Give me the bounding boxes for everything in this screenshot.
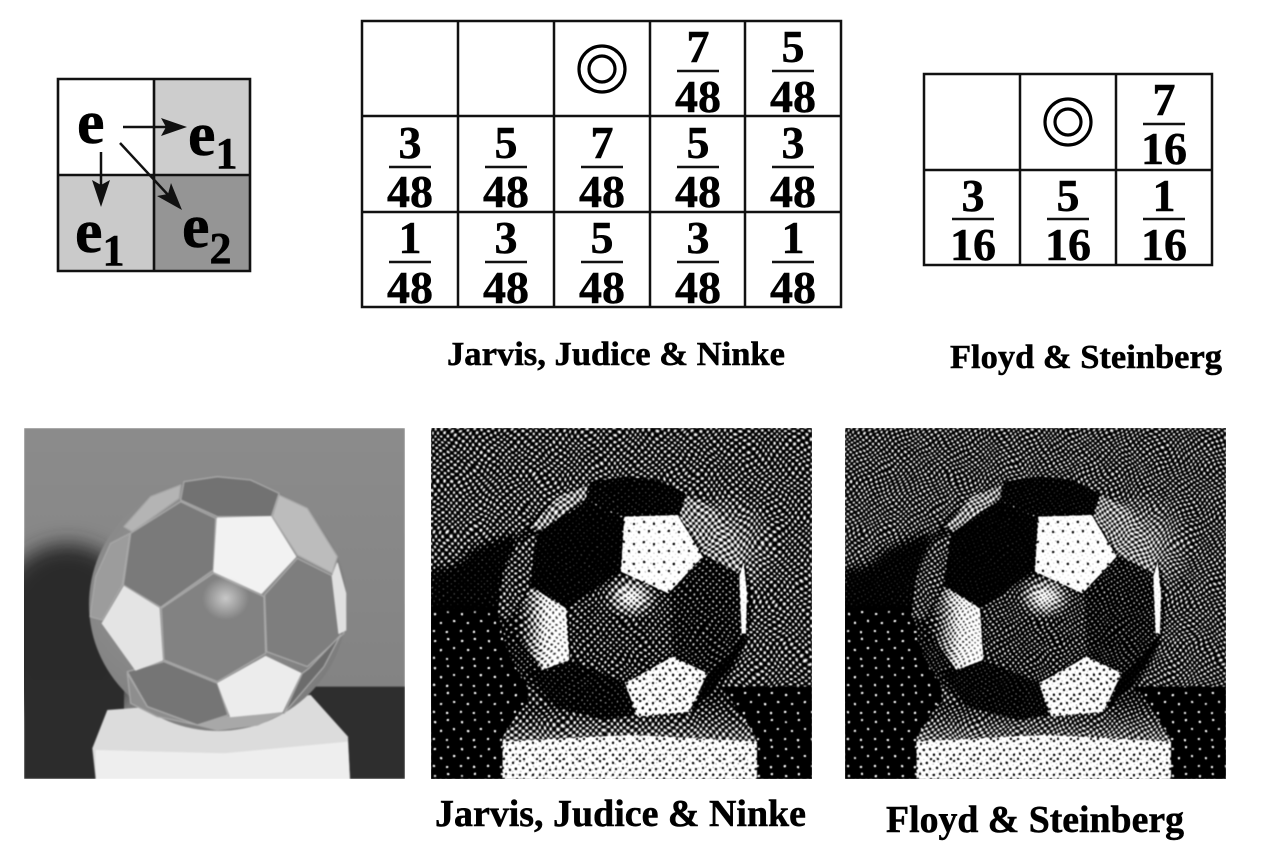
icon: current pixel target xyxy=(1045,99,1091,145)
label: e1 below: e xyxy=(75,198,103,266)
fraction row 3: 5 xyxy=(590,212,614,263)
caption: Jarvis, Judice and Ninke matrix: Jarvis, Judice & Ninke xyxy=(447,336,785,373)
image: original grayscale soccer ball xyxy=(0,428,405,779)
icon: current pixel target xyxy=(579,46,625,92)
caption: Floyd and Steinberg image: Floyd & Steinberg xyxy=(886,799,1184,841)
fraction row 2: 48 xyxy=(770,166,816,217)
fraction row 3: 3 xyxy=(494,212,518,263)
label: e2: e xyxy=(182,193,210,261)
image: Jarvis, Judice and Ninke dithered ball xyxy=(431,428,812,779)
fraction 3/16: 16 xyxy=(950,219,996,270)
fraction row 1: 5 xyxy=(782,21,804,72)
fraction row 1 xyxy=(675,21,816,122)
fraction 1/16: 16 xyxy=(1141,219,1187,270)
fraction 3/16 xyxy=(950,170,996,270)
fraction row 3: 1 xyxy=(782,212,804,263)
fraction 1/16 xyxy=(1141,170,1187,270)
fraction row 2: 48 xyxy=(387,166,433,217)
fraction row 1: 48 xyxy=(675,71,721,122)
fraction row 3 xyxy=(387,212,816,313)
fraction row 2: 5 xyxy=(494,117,518,168)
panel: error distribution grid xyxy=(58,79,250,275)
fraction row 3: 48 xyxy=(675,262,721,313)
panel: Jarvis, Judice and Ninke matrix xyxy=(362,21,841,313)
fraction row 3: 48 xyxy=(579,262,625,313)
fraction row 3: 48 xyxy=(483,262,529,313)
fraction row 2: 3 xyxy=(782,117,804,168)
fraction row 2: 3 xyxy=(398,117,422,168)
fraction row 3: 3 xyxy=(686,212,710,263)
fraction row 3: 1 xyxy=(398,212,422,263)
label: e: e xyxy=(77,89,105,157)
fraction row 2: 5 xyxy=(686,117,710,168)
label: e2: 2 xyxy=(210,224,232,273)
arrow: down xyxy=(92,152,110,207)
fraction 7/16: 7 xyxy=(1152,74,1176,125)
fraction 7/16: 16 xyxy=(1141,123,1187,174)
fraction row 2: 7 xyxy=(590,117,614,168)
fraction 3/16: 3 xyxy=(962,170,984,221)
label: e1 right: e xyxy=(188,101,216,169)
grid shading and lines xyxy=(58,79,250,271)
fraction row 2: 48 xyxy=(675,166,721,217)
panel: Floyd and Steinberg matrix xyxy=(924,74,1212,270)
fraction 7/16 xyxy=(1141,74,1187,174)
label: e1 below: 1 xyxy=(103,226,125,275)
fraction row 2: 48 xyxy=(483,166,529,217)
image: Floyd and Steinberg dithered ball xyxy=(845,428,1226,779)
fraction row 1: 48 xyxy=(770,71,816,122)
fraction row 1: 7 xyxy=(686,21,710,72)
fraction 1/16: 1 xyxy=(1152,170,1176,221)
arrow: diagonal xyxy=(120,143,182,210)
fraction row 2 xyxy=(387,117,816,217)
fraction row 3: 48 xyxy=(387,262,433,313)
arrow: right xyxy=(123,118,187,136)
fraction 5/16: 5 xyxy=(1056,170,1080,221)
fraction 5/16: 16 xyxy=(1045,219,1091,270)
caption: Jarvis, Judice and Ninke image: Jarvis, Judice & Ninke xyxy=(435,793,806,835)
matrix grid xyxy=(924,74,1212,265)
matrix grid xyxy=(362,21,841,307)
label: e1 right: 1 xyxy=(216,129,238,178)
caption: Floyd and Steinberg matrix: Floyd & Steinberg xyxy=(950,339,1222,376)
fraction row 3: 48 xyxy=(770,262,816,313)
fraction 5/16 xyxy=(1045,170,1091,270)
fraction row 2: 48 xyxy=(579,166,625,217)
